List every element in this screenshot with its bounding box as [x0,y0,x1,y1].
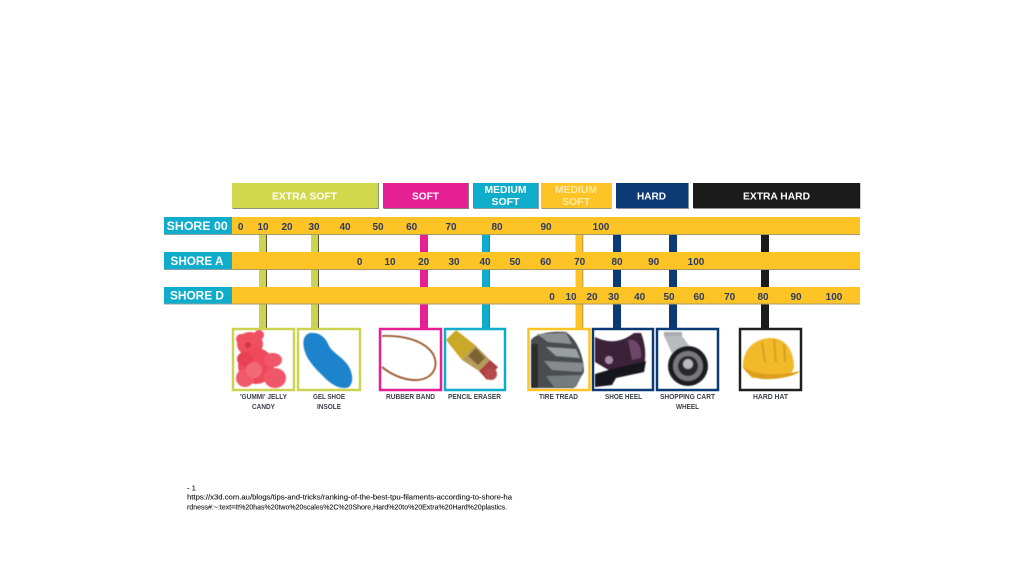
numbers: Shore D: 10 [565,292,577,303]
numbers: Shore A: 80 [611,257,623,268]
icon: tire tread [531,332,584,388]
label: shopping cart wheel: SHOPPING CART [660,392,715,401]
label: gummi jelly candy: CANDY [252,402,275,411]
icon: caster wheel [664,332,708,386]
numbers: Shore 00: 0 [238,222,244,233]
label: Shore D: SHORE D [170,290,224,302]
numbers: Shore D: 80 [757,292,769,303]
numbers: Shore D: 30 [608,292,620,303]
numbers: Shore A: 90 [648,257,660,268]
numbers: Shore A [357,257,705,268]
numbers: Shore 00: 70 [445,222,457,233]
icon: shoe heel [595,333,646,387]
icon: insole [303,333,352,388]
icon: hard hat [743,338,800,379]
vertical connector strips [259,234,769,328]
label: tire tread: TIRE TREAD [539,392,579,401]
numbers: Shore 00: 90 [540,222,552,233]
category: extra soft [232,183,379,209]
label: Shore A [164,252,232,270]
numbers: Shore D: 70 [724,292,736,303]
category: medium soft cyan [473,183,539,209]
scale row: Shore D [164,287,860,304]
category: extra soft: EXTRA SOFT [272,192,337,202]
footnote source text [187,484,513,512]
item: shopping cart wheel [657,329,718,411]
numbers: Shore D: 60 [693,292,705,303]
footnote source text: - 1 [187,484,196,492]
numbers: Shore 00: 10 [257,222,269,233]
label: gel shoe insole: GEL SHOE [313,392,345,401]
item: gummy jelly candy [233,329,294,411]
label: gummi jelly candy [240,392,287,411]
footnote source text: rdness#:~:text=It%20has%20two%20scales%2C%20Shore,Hard%20to%20Extra%20Hard%20plastics. [187,502,507,512]
item: gel shoe insole [298,329,360,411]
numbers: Shore 00: 60 [406,222,418,233]
item: hard hat [740,329,801,401]
numbers: Shore D: 40 [634,292,646,303]
category: soft [383,183,469,209]
numbers: Shore A: 10 [384,257,396,268]
label: Shore 00 [164,217,232,235]
numbers: Shore A: 30 [448,257,460,268]
category: hard [616,183,689,209]
numbers: Shore 00 [238,222,610,233]
category header row [232,183,860,209]
category: soft: SOFT [412,192,439,202]
label: hard hat: HARD HAT [753,392,788,401]
scale row: Shore 00 [164,217,860,235]
icon: pencil eraser [446,330,498,380]
label: shopping cart wheel: WHEEL [676,402,699,411]
label: rubber band: RUBBER BAND [386,392,436,401]
category: medium soft cyan: MEDIUM [484,185,526,196]
category: medium soft yellow: SOFT [562,197,590,208]
label: gel shoe insole [313,392,345,411]
item: tire tread [528,329,590,401]
item: rubber band [380,329,441,401]
icon: rubber band [382,336,435,380]
numbers: Shore 00: 80 [491,222,503,233]
numbers: Shore 00: 100 [593,222,610,233]
category: medium soft yellow [541,183,612,209]
numbers: Shore 00: 30 [308,222,320,233]
label: shopping cart wheel [660,392,715,411]
numbers: Shore 00: 20 [281,222,293,233]
category: extra hard: EXTRA HARD [743,192,810,202]
numbers: Shore 00: 50 [372,222,384,233]
label: Shore A: SHORE A [170,256,224,268]
label: pencil eraser: PENCIL ERASER [448,392,501,401]
numbers: Shore A: 50 [509,257,521,268]
numbers: Shore D [549,292,843,303]
footnote source text: https://x3d.com.au/blogs/tips-and-tricks/ranking-of-the-best-tpu-filaments-according-to-shore-ha [187,492,513,502]
item: pencil eraser [445,329,505,401]
label: Shore 00: SHORE 00 [167,221,228,233]
numbers: Shore D: 50 [663,292,675,303]
numbers: Shore A: 20 [418,257,430,268]
numbers: Shore D: 0 [549,292,555,303]
label: gel shoe insole: INSOLE [317,402,341,411]
item: shoe heel [593,329,653,401]
numbers: Shore D: 100 [826,292,843,303]
numbers: Shore D: 90 [790,292,802,303]
numbers: Shore A: 0 [357,257,363,268]
numbers: Shore A: 70 [574,257,586,268]
numbers: Shore 00: 40 [339,222,351,233]
numbers: Shore D: 20 [586,292,598,303]
category: medium soft yellow: MEDIUM [555,185,597,196]
icon: gummy bear [236,330,286,388]
category: medium soft cyan: SOFT [492,197,520,208]
numbers: Shore A: 40 [479,257,491,268]
label: gummi jelly candy: 'GUMMI' JELLY [240,392,287,401]
label: Shore D [164,287,232,304]
category: hard: HARD [637,192,666,202]
numbers: Shore A: 100 [688,257,705,268]
numbers: Shore A: 60 [540,257,552,268]
scale row: Shore A [164,252,860,270]
category: extra hard [693,183,860,209]
label: shoe heel: SHOE HEEL [605,392,642,401]
